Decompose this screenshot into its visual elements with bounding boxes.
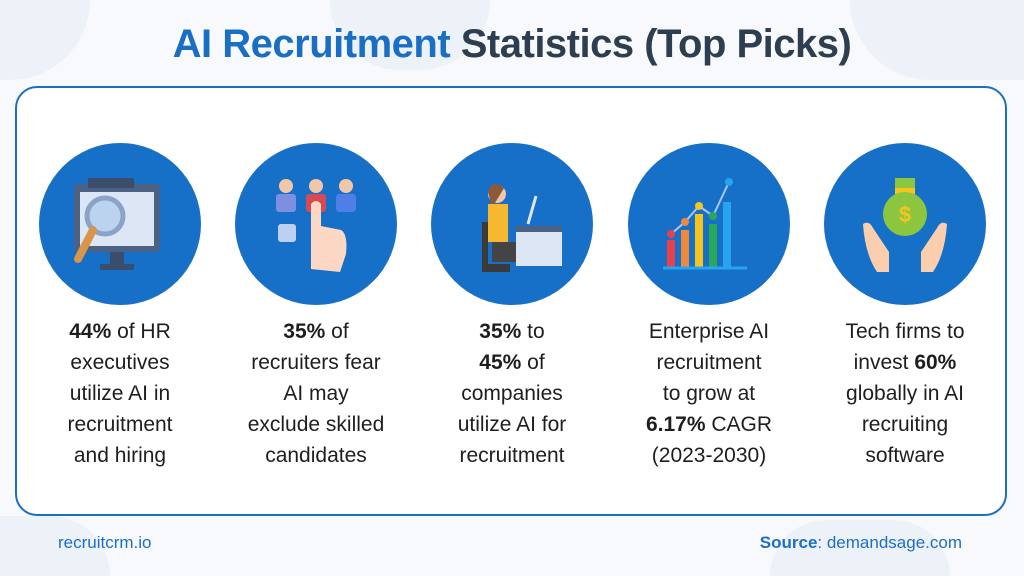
text: globally in AI: [846, 382, 964, 405]
text: AI may: [283, 382, 349, 405]
text: invest 60%: [854, 351, 956, 374]
text: [248, 320, 384, 467]
text: recruitment: [67, 413, 173, 436]
icon: person at laptop: [431, 143, 593, 305]
text: companies: [461, 382, 563, 405]
text: to grow at: [663, 382, 755, 405]
column 5: [824, 143, 986, 467]
text: candidates: [265, 444, 367, 467]
text: recruiters fear: [251, 351, 381, 374]
text: exclude skilled: [248, 413, 384, 436]
text: 6.17% CAGR: [646, 413, 772, 436]
text: executives: [70, 351, 170, 374]
footer: brand: recruitcrm.io: [58, 533, 152, 552]
icon: candidates selection: [235, 143, 397, 305]
text: recruiting: [862, 413, 948, 436]
text: [458, 320, 566, 467]
icon: hands with money bag: [824, 143, 986, 305]
text: recruitment: [459, 444, 565, 467]
column 4: [628, 143, 790, 467]
text: utilize AI in: [70, 382, 170, 405]
title: AI Recruitment Statistics (Top Picks): [173, 22, 851, 66]
text: 35% of: [283, 320, 349, 343]
text: (2023-2030): [652, 444, 766, 467]
text: recruitment: [656, 351, 762, 374]
text: software: [865, 444, 945, 467]
text: 35% to: [479, 320, 545, 343]
text: [67, 320, 173, 467]
icon: hands with money bag: $: [899, 202, 911, 227]
text: 44% of HR: [69, 320, 171, 343]
icon: growth chart: [628, 143, 790, 305]
text: Tech firms to: [845, 320, 965, 343]
text: Enterprise AI: [649, 320, 769, 343]
text: [646, 320, 772, 467]
icon: monitor with magnifier: [39, 143, 201, 305]
column 3: [431, 143, 593, 467]
text: utilize AI for: [458, 413, 566, 436]
footer: source: Source: demandsage.com: [760, 533, 962, 552]
column 2: [235, 143, 397, 467]
text: [845, 320, 965, 467]
panel: statistics: [15, 86, 1007, 516]
text: 45% of: [479, 351, 545, 374]
column 1: [39, 143, 201, 467]
text: and hiring: [74, 444, 166, 467]
